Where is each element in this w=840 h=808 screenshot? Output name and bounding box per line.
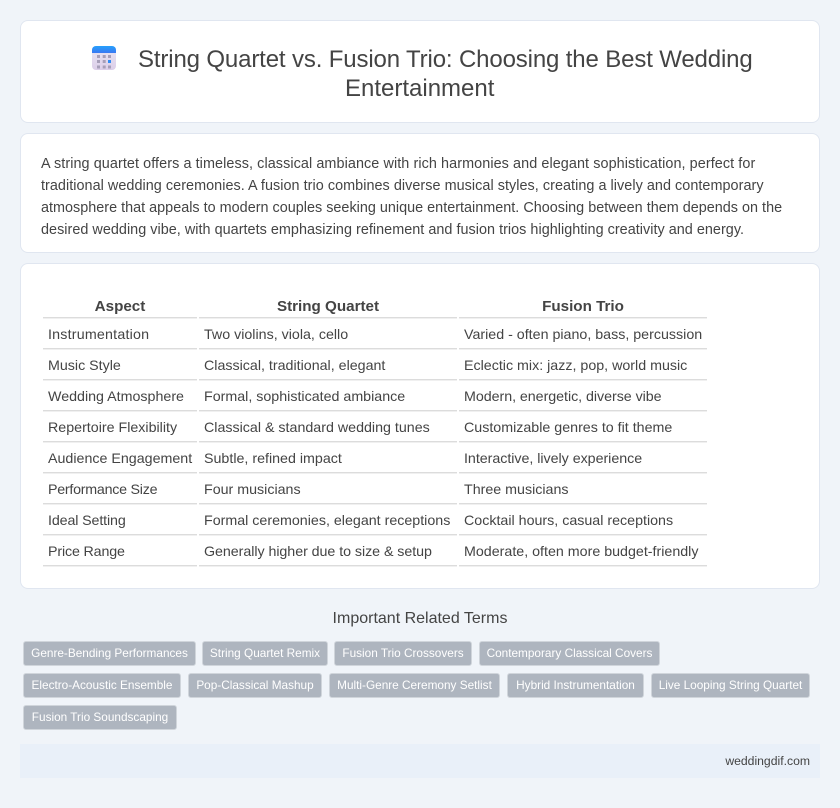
intro text: atmosphere that appeals to modern couples seeking unique entertainment. Choosing between them depends on the [41, 200, 782, 216]
tag: Fusion Trio Soundscaping [32, 710, 168, 724]
row: Repertoire Flexibility: Customizable genres to fit theme [464, 420, 672, 436]
row: Repertoire Flexibility: Repertoire Flexibility [48, 420, 177, 436]
row: Ideal Setting [48, 513, 673, 529]
row: Ideal Setting: Ideal Setting [48, 513, 126, 529]
related term tags [23, 641, 810, 730]
row: Ideal Setting: Formal ceremonies, elegant receptions [204, 513, 450, 529]
intro text: desired wedding vibe, with quartets emphasizing refinement and fusion trios highlighting creativity and energy. [41, 222, 744, 238]
title: Entertainment [345, 75, 494, 102]
row: Wedding Atmosphere [48, 389, 662, 405]
row: Wedding Atmosphere: Modern, energetic, diverse vibe [464, 389, 662, 405]
tag [507, 673, 644, 698]
table header: Fusion Trio [542, 298, 624, 315]
panel: comparison table [20, 263, 820, 589]
row: Price Range: Generally higher due to size & setup [204, 544, 432, 560]
row: Repertoire Flexibility [48, 420, 672, 436]
panel: header [20, 20, 820, 123]
row: Instrumentation: Instrumentation [48, 327, 149, 343]
row: Instrumentation [48, 327, 702, 343]
row: Audience Engagement: Subtle, refined impact [204, 451, 342, 467]
row: Music Style [48, 358, 687, 374]
row: Wedding Atmosphere: Formal, sophisticated ambiance [204, 389, 405, 405]
intro text: traditional wedding ceremonies. A fusion trio combines diverse musical styles, creating a lively and contemporary [41, 178, 764, 194]
title [138, 46, 753, 102]
tag: String Quartet Remix [210, 646, 320, 660]
row: Audience Engagement [48, 451, 642, 467]
row: Price Range: Price Range [48, 544, 125, 560]
icon: calendar [92, 46, 116, 70]
footer [20, 744, 820, 778]
panel: introduction [20, 133, 820, 253]
tag [23, 673, 181, 698]
table header: Aspect [95, 298, 145, 315]
tag: Multi-Genre Ceremony Setlist [337, 678, 492, 692]
tag [23, 641, 196, 666]
tag [329, 673, 500, 698]
row: Audience Engagement: Interactive, lively experience [464, 451, 642, 467]
tag [188, 673, 322, 698]
row: Music Style: Music Style [48, 358, 121, 374]
row: Wedding Atmosphere: Wedding Atmosphere [48, 389, 184, 405]
tag: Genre-Bending Performances [31, 646, 188, 660]
tag: Electro-Acoustic Ensemble [32, 678, 172, 692]
intro text: A string quartet offers a timeless, classical ambiance with rich harmonies and elegant sophistication, perfect for [41, 156, 755, 172]
row: Music Style: Classical, traditional, elegant [204, 358, 385, 374]
row: Music Style: Eclectic mix: jazz, pop, world music [464, 358, 687, 374]
tag: Fusion Trio Crossovers [342, 646, 464, 660]
tag [651, 673, 810, 698]
row: Price Range: Moderate, often more budget-friendly [464, 544, 698, 560]
row: Performance Size: Performance Size [48, 482, 157, 498]
row: Audience Engagement: Audience Engagement [48, 451, 192, 467]
table header: String Quartet [277, 298, 379, 315]
tag: Live Looping String Quartet [659, 678, 802, 692]
row: Performance Size [48, 482, 569, 498]
row: Performance Size: Three musicians [464, 482, 569, 498]
row: Instrumentation: Two violins, viola, cello [204, 327, 348, 343]
row: Price Range [48, 544, 698, 560]
heading: related terms: Important Related Terms [333, 610, 507, 627]
tag: Pop-Classical Mashup [196, 678, 314, 692]
intro text [41, 156, 782, 238]
title: String Quartet vs. Fusion Trio: Choosing the Best Wedding [138, 46, 753, 73]
tag: Contemporary Classical Covers [487, 646, 652, 660]
footer text: weddingdif.com [725, 754, 810, 768]
tag [334, 641, 472, 666]
tag [202, 641, 328, 666]
row: Ideal Setting: Cocktail hours, casual receptions [464, 513, 673, 529]
tag [479, 641, 660, 666]
row: Instrumentation: Varied - often piano, bass, percussion [464, 327, 702, 343]
row: Repertoire Flexibility: Classical & standard wedding tunes [204, 420, 430, 436]
tag [23, 705, 177, 730]
row: Performance Size: Four musicians [204, 482, 301, 498]
comparison table [43, 298, 707, 567]
tag: Hybrid Instrumentation [516, 678, 635, 692]
table header [95, 298, 624, 315]
